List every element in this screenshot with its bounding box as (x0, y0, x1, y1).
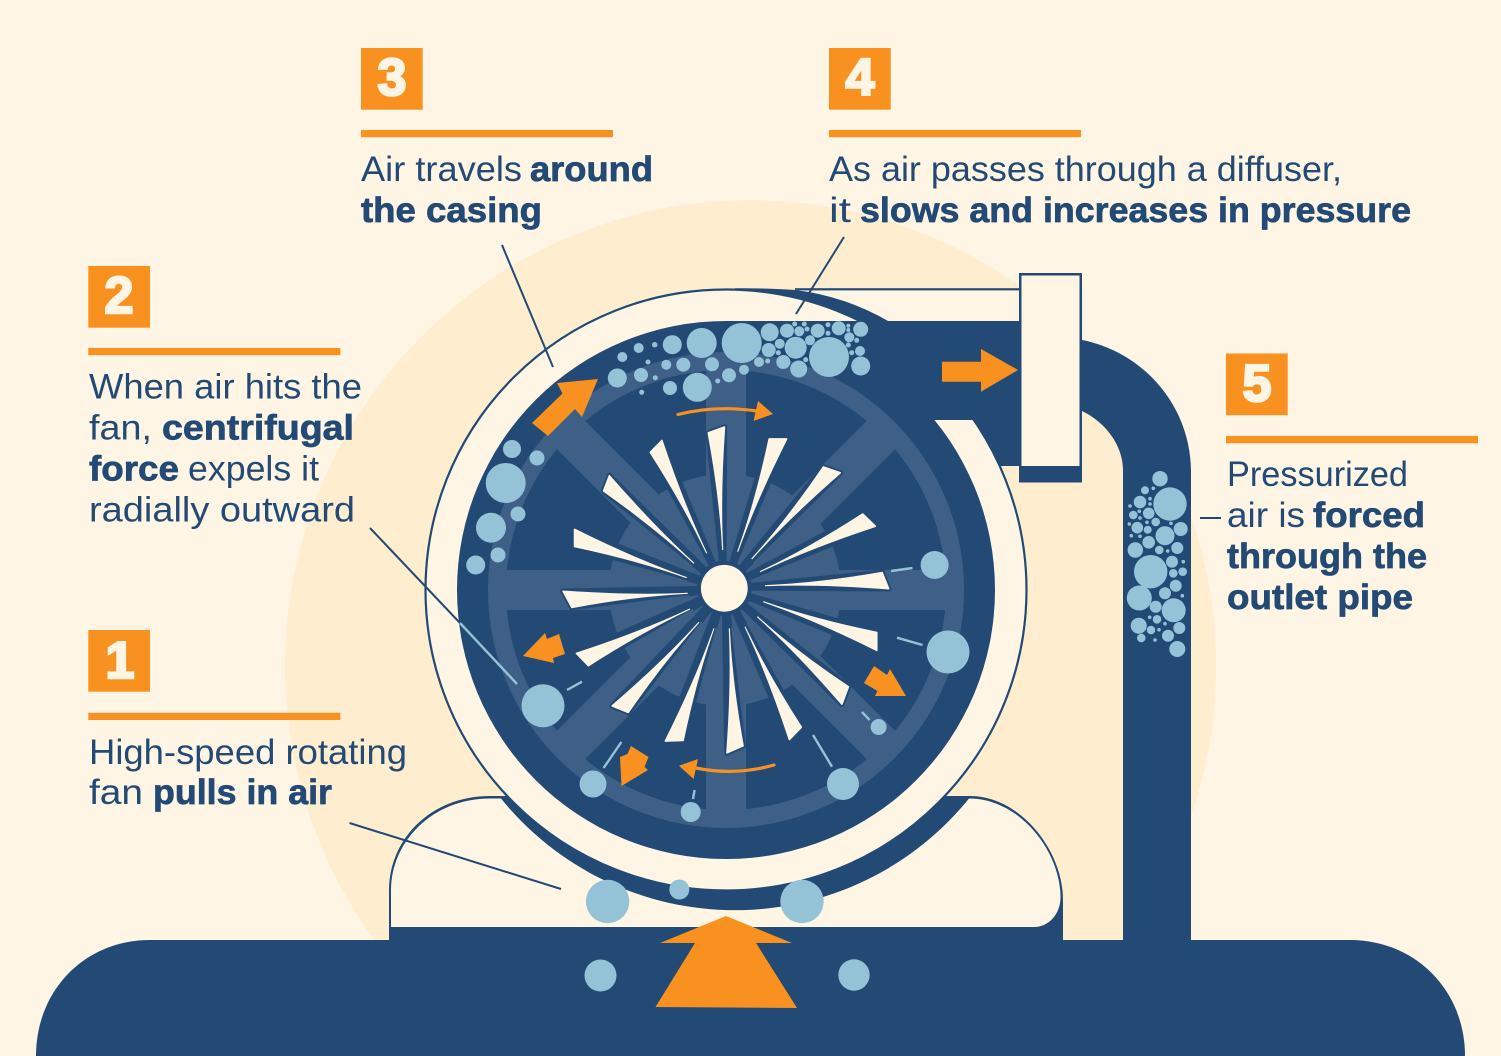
step 2 badge (88, 266, 150, 328)
air particles in outlet pipe (1127, 471, 1188, 657)
diffuser upper channel (726, 288, 1022, 323)
impeller spokes and rim (496, 360, 956, 820)
step 3 leader line (502, 245, 553, 367)
base intake duct (36, 940, 1465, 1056)
step 4 text: slows and increases in pressure (860, 191, 1411, 230)
fan blades (563, 427, 889, 753)
step 2 leader line (370, 528, 517, 684)
step 5 text (1227, 455, 1427, 617)
step 3 badge: 3 (378, 49, 406, 107)
diffuser block (1019, 273, 1082, 482)
step 4 text: it (829, 191, 851, 230)
step 3 text: around (530, 150, 653, 189)
step 1 text: High-speed rotating (89, 733, 407, 772)
step 1 badge: 1 (106, 632, 134, 690)
step 5 text: forced (1313, 496, 1425, 535)
impeller (457, 321, 995, 859)
arrow: air intake (656, 916, 797, 1008)
step 5 leader line (1200, 517, 1221, 519)
step 5 rule (1226, 436, 1478, 443)
step 5 (1200, 354, 1478, 617)
step 2 (88, 266, 517, 684)
diffuser duct (726, 321, 1022, 590)
step 5 badge: 5 (1243, 355, 1271, 413)
step 2 text: force (89, 450, 179, 488)
arrow: rotation bottom (679, 759, 774, 779)
step 3 text (361, 150, 653, 230)
step 5 badge (1226, 354, 1288, 415)
air particles in top of casing (608, 321, 870, 402)
step 5 text: air is (1227, 496, 1305, 535)
arrow: air into casing (532, 379, 598, 436)
step 1 (88, 630, 561, 889)
arrow: outward lower right (864, 666, 906, 696)
step 5 text: outlet pipe (1227, 578, 1413, 617)
air particles on left of casing (466, 440, 544, 574)
step 2 text: expels it (188, 450, 319, 488)
step 3 text: the casing (361, 191, 542, 230)
step 1 leader line (350, 823, 561, 889)
impeller hub backing (609, 474, 841, 706)
step 5 text: through the (1227, 537, 1427, 576)
step 2 text: When air hits the (89, 368, 362, 406)
step 3 (361, 48, 653, 367)
step 4 (796, 48, 1411, 314)
step 1 text: fan (89, 773, 143, 812)
step 1 text: pulls in air (153, 773, 332, 812)
step 2 text: centrifugal (162, 408, 354, 448)
step 1 badge (88, 630, 150, 692)
arrow: rotation top (678, 401, 773, 421)
step 4 text: As air passes through a diffuser, (829, 150, 1342, 189)
step 4 badge: 4 (846, 49, 875, 107)
blade backing (563, 427, 889, 753)
step 2 text: radially outward (89, 490, 355, 530)
step 4 leader line (796, 237, 844, 314)
step 4 rule (829, 130, 1081, 137)
radial dark lines around the hub (688, 552, 763, 627)
step 2 text (89, 368, 362, 530)
casing ring (426, 290, 1026, 890)
impeller disc (457, 321, 995, 859)
central hub (697, 561, 752, 616)
air particles with motion dashes inside the impeller (522, 551, 970, 822)
arrow: air to diffuser (942, 349, 1018, 392)
outlet pipe (1082, 340, 1191, 945)
step 5 text: Pressurized (1227, 455, 1408, 494)
step 4 badge (829, 48, 891, 110)
inlet housing (389, 796, 1063, 945)
casing lower crescent (499, 796, 971, 910)
arrow: outward lower left (523, 633, 565, 663)
step 2 rule (88, 348, 340, 355)
step 1 rule (88, 713, 340, 720)
step 4 text (829, 150, 1411, 230)
background circle (285, 200, 1216, 1000)
step 1 text (89, 733, 407, 812)
arrow: outward bottom (620, 746, 648, 786)
step 3 text: Air travels (361, 150, 522, 189)
step 2 text: fan, (89, 408, 152, 448)
step 2 badge: 2 (105, 267, 133, 325)
air particles at the inlet (584, 880, 870, 992)
step 3 badge (361, 48, 423, 110)
step 3 rule (361, 130, 613, 137)
